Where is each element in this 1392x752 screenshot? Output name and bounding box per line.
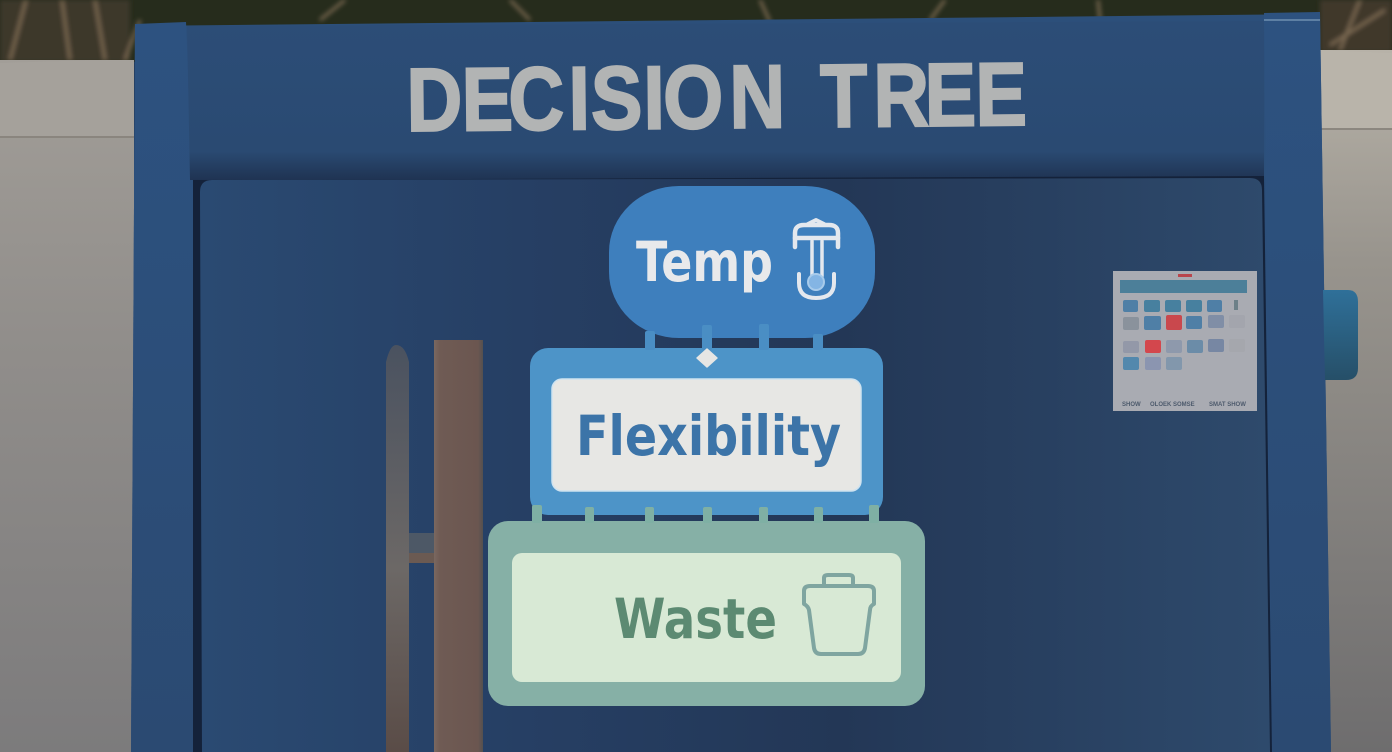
connectors: temp to flexibility xyxy=(645,324,823,350)
icon: trash bin xyxy=(804,575,874,654)
title: DECISION TREE xyxy=(406,43,1027,150)
door recess xyxy=(193,176,1272,752)
door handle xyxy=(386,340,483,752)
waste label: Waste xyxy=(614,587,777,651)
door xyxy=(200,178,1270,752)
calendar sticker: SHOW xyxy=(1122,402,1141,408)
background foliage xyxy=(0,0,1392,62)
left wall xyxy=(0,60,134,752)
calendar sticker xyxy=(1113,271,1257,411)
side latch xyxy=(1323,290,1358,380)
calendar sticker: OLOEK SOMSE xyxy=(1150,402,1195,408)
connectors: flexibility to waste xyxy=(532,505,879,523)
right wall xyxy=(1320,50,1392,752)
icon: thermometer xyxy=(795,220,838,298)
node: waste xyxy=(488,521,925,706)
left post xyxy=(131,22,193,752)
diamond xyxy=(697,349,717,367)
flexibility label: Flexibility xyxy=(576,404,841,468)
temp label: Temp xyxy=(636,230,773,294)
header panel xyxy=(187,21,1264,180)
calendar sticker: SMAT SHOW xyxy=(1209,402,1246,408)
right post xyxy=(1264,12,1331,752)
node: flexibility xyxy=(530,348,883,515)
node: temp xyxy=(609,186,875,338)
